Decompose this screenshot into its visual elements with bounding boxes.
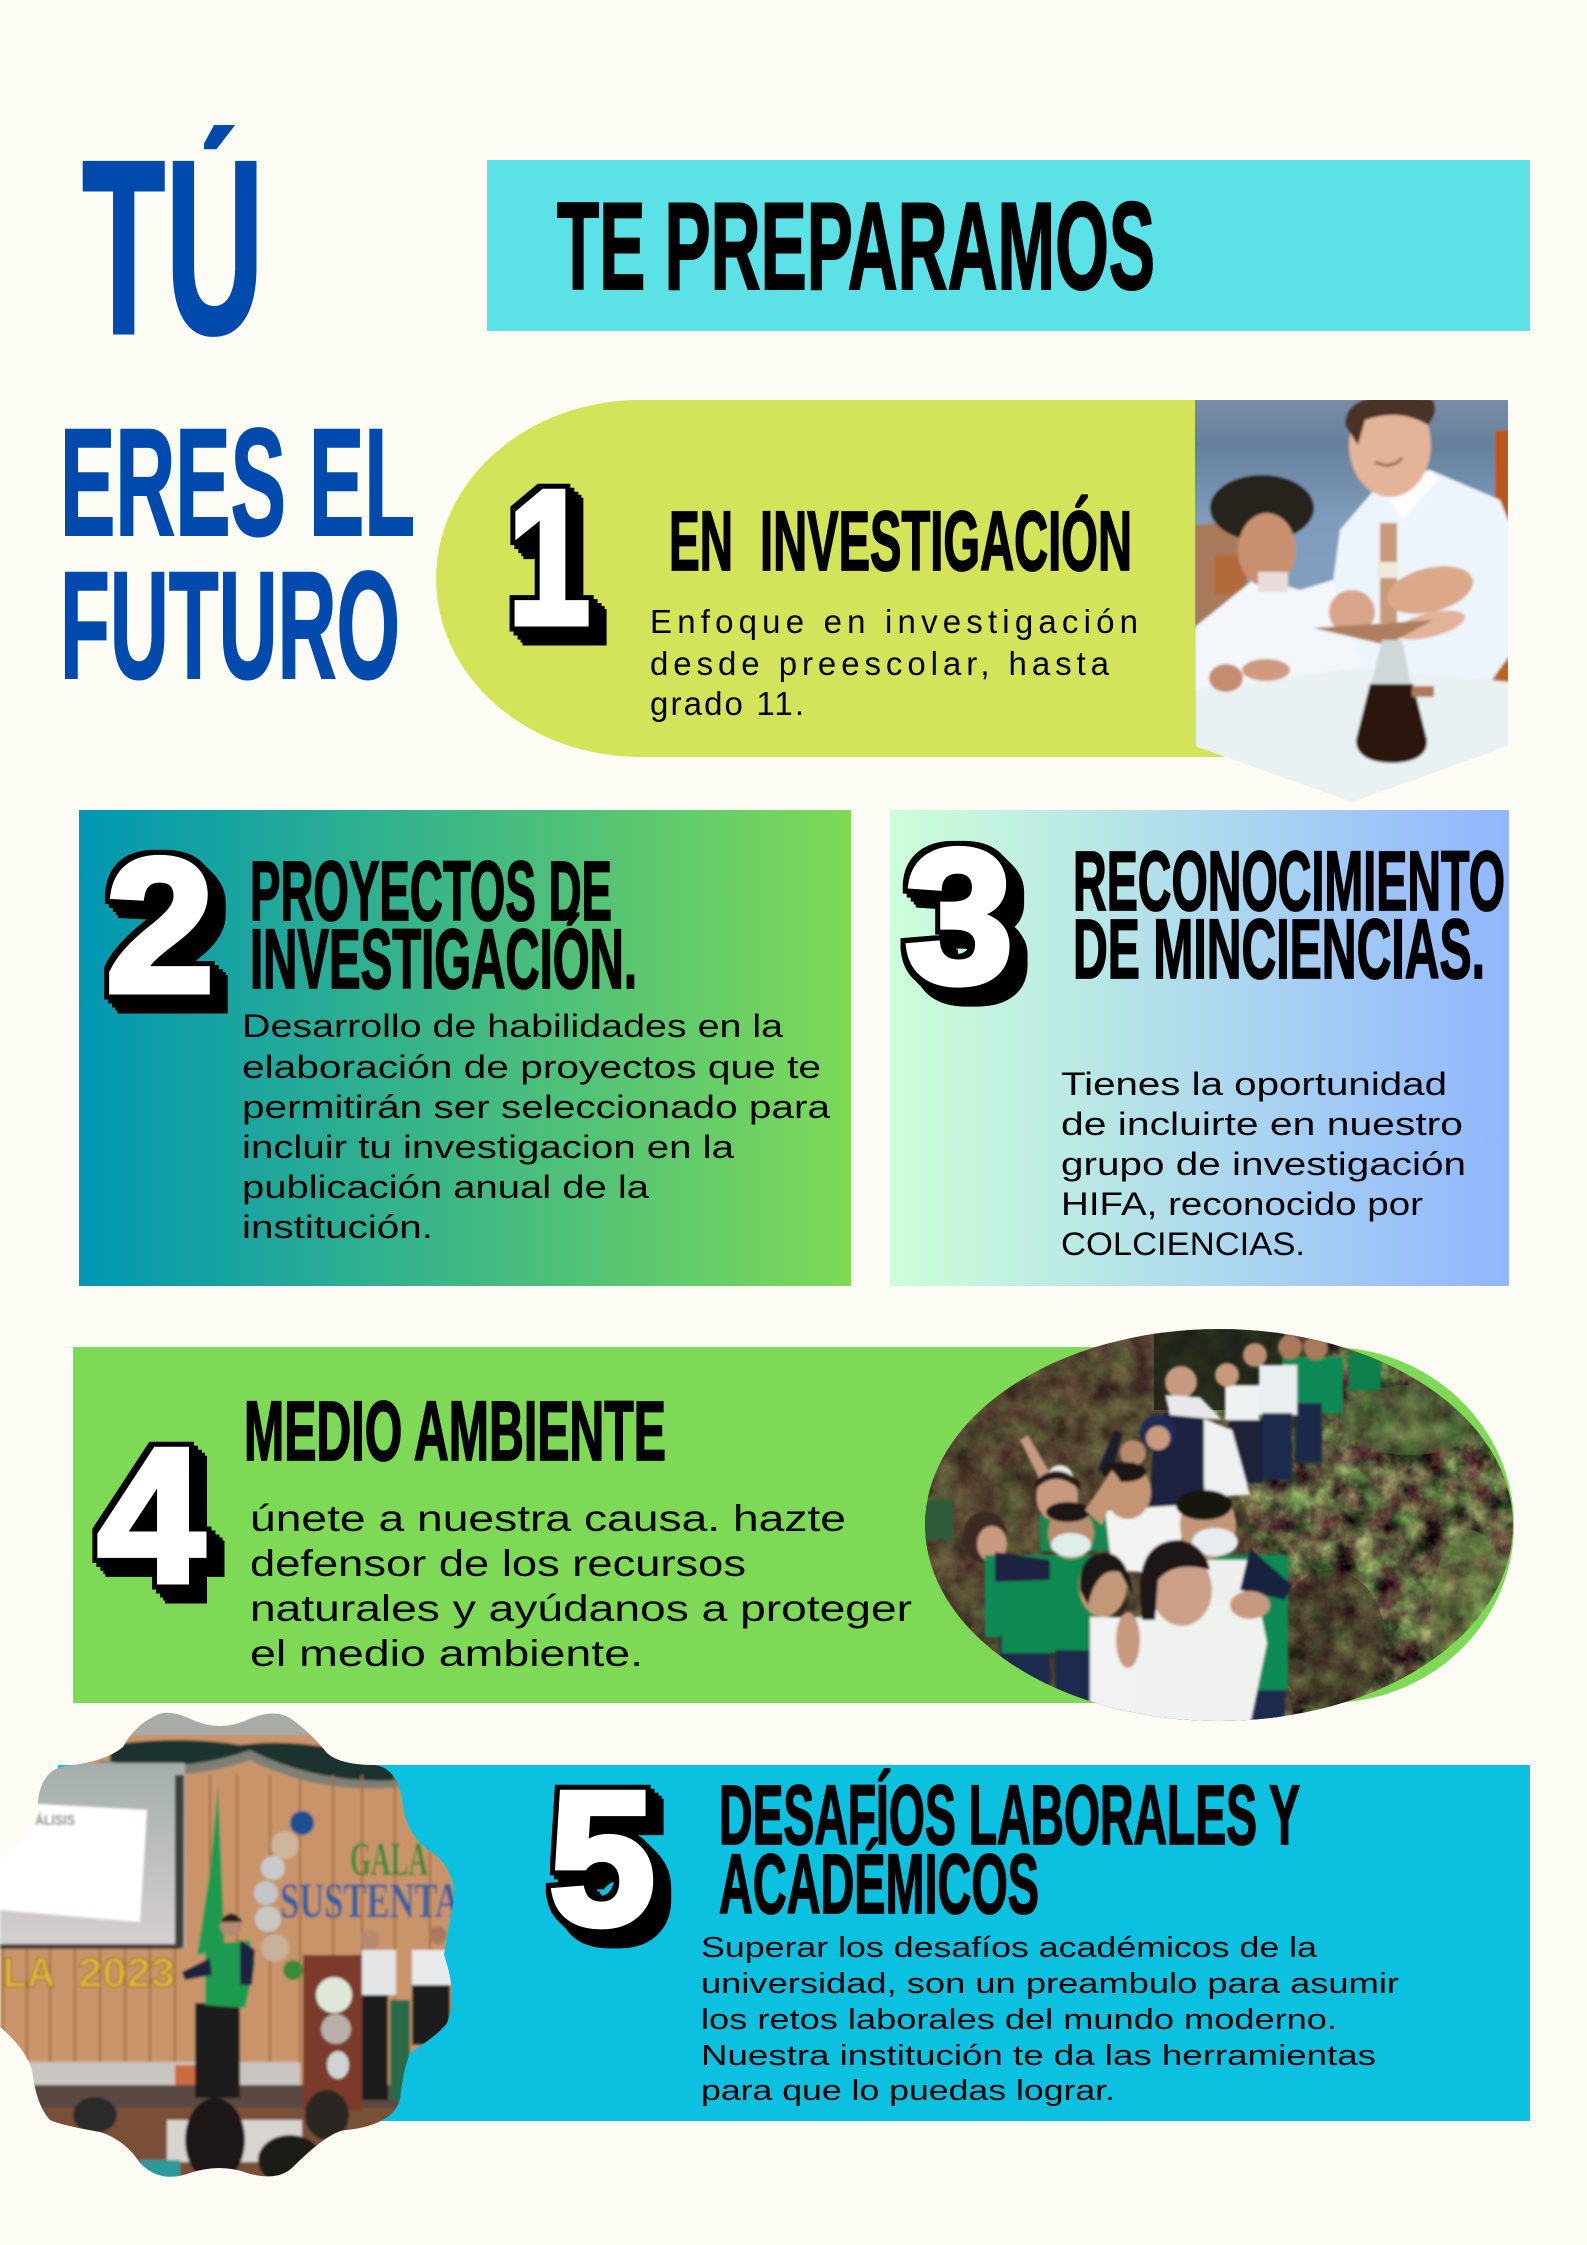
text: enfoque: Enfoque en investigación <box>650 603 1138 640</box>
number 5: 5 <box>549 1753 655 1965</box>
text: desarrollo: permitirán ser seleccionado para <box>242 1089 830 1125</box>
heading: reconocimiento <box>1073 834 1505 996</box>
title: TÚ: TÚ <box>82 108 264 386</box>
number 2: 2 <box>106 820 214 1032</box>
text: superar los desafíos: Nuestra institución te da las herramientas <box>701 2040 1376 2072</box>
photo: gala sustentación: LA <box>3 1949 55 1996</box>
heading: desafíos <box>719 1768 1300 1931</box>
heading: en investigación: EN <box>669 494 733 588</box>
text: desarrollo: publicación anual de la <box>242 1169 649 1205</box>
panel 3: reconocimiento de minciencias <box>890 810 1509 1286</box>
text: tienes la oportunidad: HIFA, reconocido por <box>1061 1186 1423 1222</box>
heading: proyectos <box>250 844 637 1006</box>
text: únete a nuestra causa: defensor de los recursos <box>250 1543 746 1584</box>
panel 4: medio ambiente <box>73 1347 1514 1703</box>
number 3: 3 <box>905 811 1013 1023</box>
title: ERES EL FUTURO: FUTURO <box>60 540 400 711</box>
text: tienes la oportunidad <box>1061 1066 1466 1262</box>
text: únete a nuestra causa: naturales y ayúdanos a proteger <box>250 1588 912 1629</box>
heading: desafíos: ACADÉMICOS <box>719 1837 1039 1931</box>
text: superar los desafíos: universidad, son un preambulo para asumir <box>701 1968 1399 2000</box>
photo: gala sustentación: 2023 <box>78 1949 175 1996</box>
text: enfoque: grado 11. <box>650 685 804 722</box>
heading: proyectos: INVESTIGACIÓN. <box>250 912 637 1006</box>
heading: medio ambiente: MEDIO AMBIENTE <box>244 1384 666 1478</box>
heading: proyectos: PROYECTOS DE <box>250 844 612 938</box>
text: únete a nuestra causa: el medio ambiente. <box>250 1633 643 1674</box>
text: superar los desafíos: los retos laborales del mundo moderno. <box>701 2004 1337 2036</box>
photo: gala sustentación <box>0 1705 460 2185</box>
photo: gala sustentación: ÁLISIS <box>35 1812 75 1829</box>
text: desarrollo: incluir tu investigacion en la <box>242 1129 734 1165</box>
text: tienes la oportunidad: grupo de investigación <box>1061 1146 1466 1182</box>
text: superar los desafíos <box>701 1932 1399 2107</box>
panel 5: desafíos laborales y académicos <box>58 1753 1530 2121</box>
title: ERES EL FUTURO: ERES EL <box>60 397 415 568</box>
text: desarrollo: Desarrollo de habilidades en la <box>242 1008 783 1044</box>
title: ERES EL FUTURO <box>60 397 415 711</box>
panel 1: en investigación <box>436 400 1225 757</box>
text: desarrollo: institución. <box>242 1209 433 1245</box>
number 1: 1 <box>508 452 590 664</box>
text: tienes la oportunidad: Tienes la oportunidad <box>1061 1066 1447 1102</box>
panel 2: proyectos de investigación <box>79 810 851 1286</box>
text: desarrollo <box>242 1008 830 1245</box>
photo: estudiantes en el bosque <box>920 1325 1520 1725</box>
text: superar los desafíos: para que lo puedas lograr. <box>701 2075 1115 2107</box>
text: enfoque: desde preescolar, hasta <box>650 645 1110 682</box>
photo: niños en laboratorio <box>1190 393 1515 805</box>
text: superar los desafíos: Superar los desafíos académicos de la <box>701 1932 1318 1964</box>
text: enfoque <box>650 603 1138 722</box>
photo: gala sustentación: GALA <box>350 1833 428 1886</box>
heading: en investigación <box>669 494 1132 588</box>
text: tienes la oportunidad: COLCIENCIAS. <box>1061 1226 1305 1262</box>
text: desarrollo: elaboración de proyectos que te <box>242 1049 821 1085</box>
heading: en investigación: INVESTIGACIÓN <box>760 494 1132 588</box>
text: únete a nuestra causa <box>250 1498 912 1674</box>
text: tienes la oportunidad: de incluirte en nuestro <box>1061 1106 1463 1142</box>
photo: gala sustentación: SUSTENTA <box>280 1872 460 1928</box>
number 4: 4 <box>98 1410 204 1622</box>
text: únete a nuestra causa: únete a nuestra causa. hazte <box>250 1498 846 1539</box>
